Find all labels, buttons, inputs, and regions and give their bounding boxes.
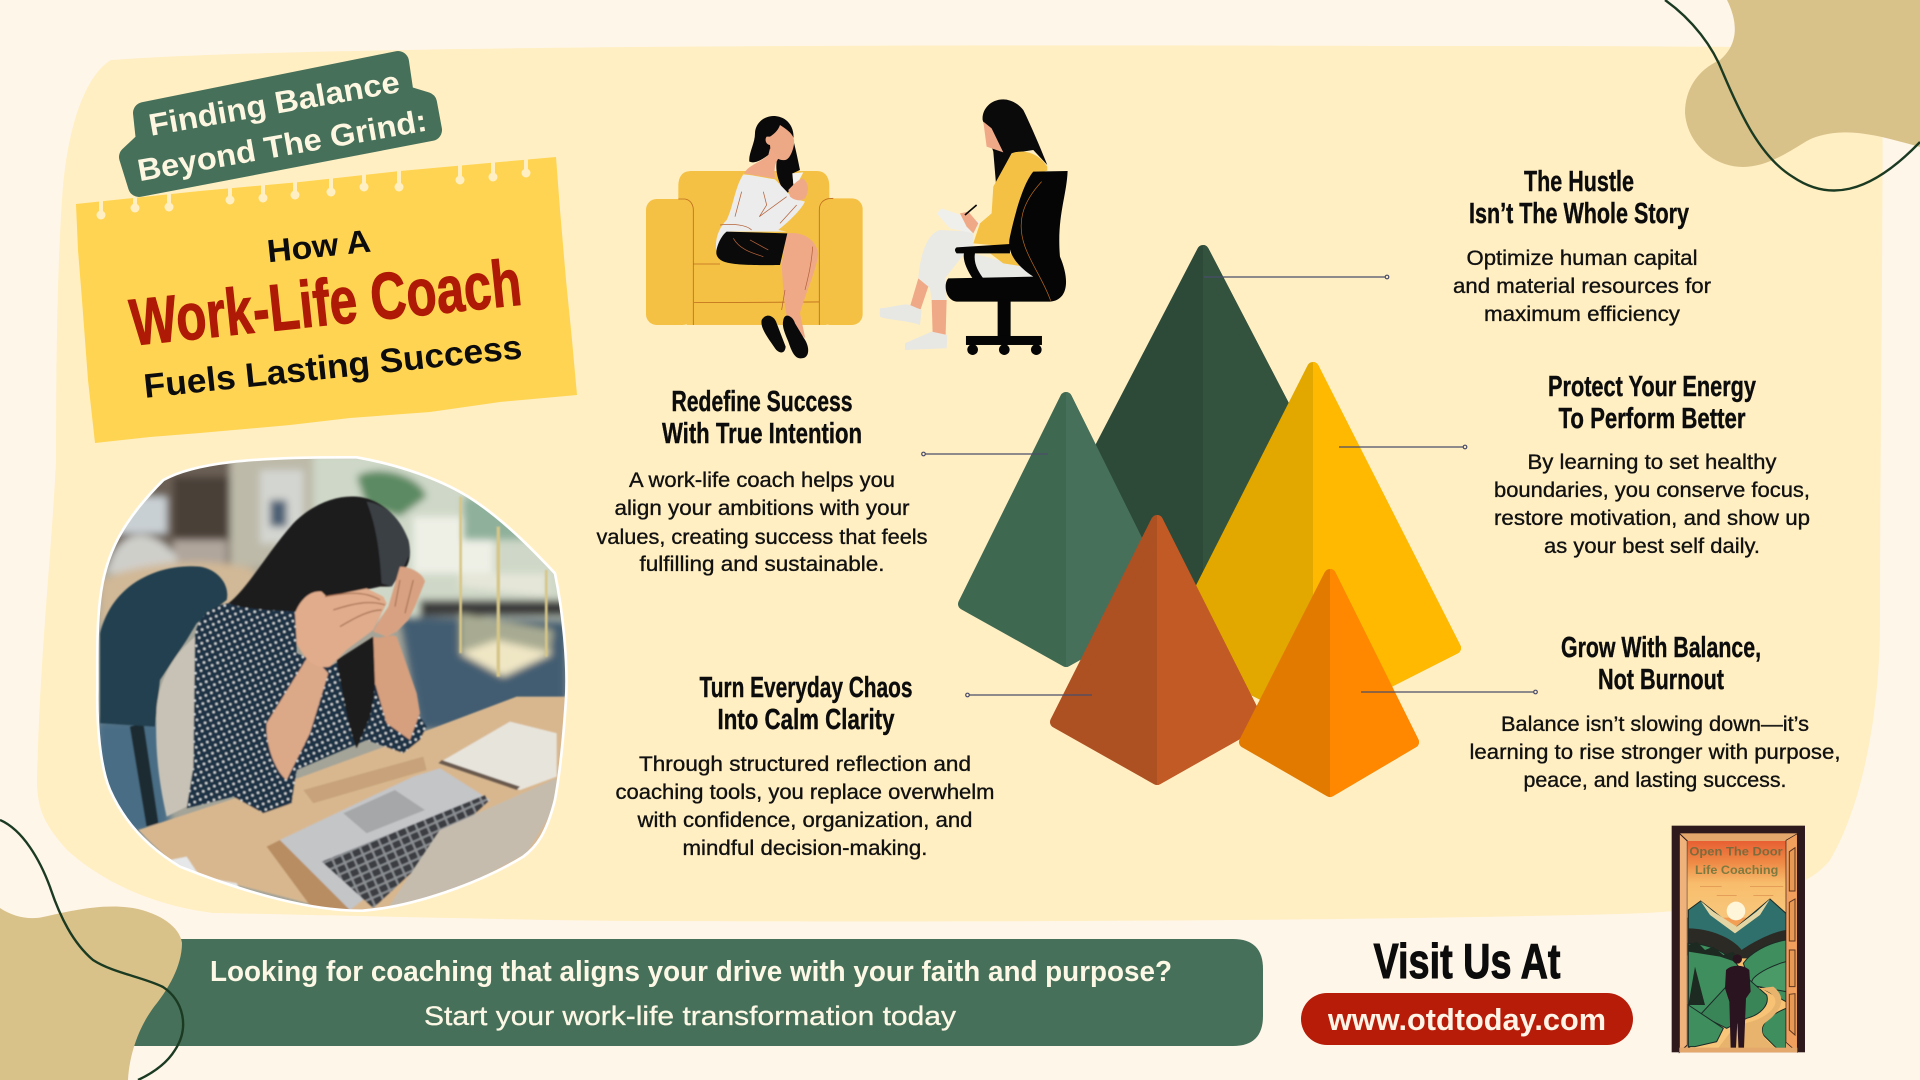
text block: Protect Your Energy: restore motivation, and show up xyxy=(1494,507,1810,530)
text: visit us at: Visit Us At xyxy=(1374,935,1560,989)
decoration: bottom-left blob xyxy=(0,907,182,1080)
logo: open the door life coaching xyxy=(1672,826,1805,1052)
title: green tab with subtitle: Beyond The Grind: xyxy=(135,103,429,188)
text block: Protect Your Energy: By learning to set healthy xyxy=(1528,451,1777,474)
text block: Protect Your Energy: boundaries, you conserve focus, xyxy=(1494,479,1810,502)
text block: Grow With Balance: peace, and lasting success. xyxy=(1524,769,1786,792)
title: green tab with subtitle xyxy=(130,62,431,188)
text block: The Hustle: Optimize human capital xyxy=(1466,247,1698,270)
text block: Redefine Success xyxy=(596,386,928,576)
chart: layered pyramids xyxy=(964,251,1455,791)
illustration: client on armchair xyxy=(646,116,863,358)
title: main headline xyxy=(126,223,525,406)
logo: open the door life coaching: Life Coaching xyxy=(1695,863,1778,877)
logo: open the door life coaching: Open The Door xyxy=(1689,845,1783,859)
text block: Protect Your Energy xyxy=(1494,371,1810,558)
decoration: bottom-left curve xyxy=(0,820,183,1080)
photo: stressed woman at laptop xyxy=(93,453,570,917)
title: main headline: Work-Life Coach xyxy=(126,245,525,359)
text block: Turn Everyday Chaos: Turn Everyday Chaos xyxy=(700,672,912,704)
text block: Turn Everyday Chaos: with confidence, organization, and xyxy=(636,809,972,832)
text block: The Hustle: maximum efficiency xyxy=(1484,303,1681,326)
text block: Redefine Success: fulfilling and sustainable. xyxy=(640,553,884,576)
text block: Redefine Success: With True Intention xyxy=(662,418,862,450)
text block: Grow With Balance: Grow With Balance, xyxy=(1561,632,1761,664)
text block: Turn Everyday Chaos xyxy=(616,672,994,860)
text block: Grow With Balance: Balance isn’t slowing down—it’s xyxy=(1501,713,1809,736)
text block: The Hustle: and material resources for xyxy=(1453,275,1711,298)
text block: Turn Everyday Chaos: coaching tools, you replace overwhelm xyxy=(616,781,994,804)
panel: title sticky note xyxy=(76,157,577,443)
button: website url xyxy=(1301,993,1633,1045)
panel: call-to-action banner: Looking for coaching that aligns your drive with your faith and purpose? xyxy=(210,956,1172,988)
pyramid: green xyxy=(964,398,1168,661)
text block: Turn Everyday Chaos: mindful decision-making. xyxy=(682,837,928,860)
icon: seated client figure xyxy=(716,116,818,358)
illustration: coach on office chair xyxy=(880,99,1068,355)
button: website url: www.otdtoday.com xyxy=(1327,1002,1606,1037)
text block: Turn Everyday Chaos: Through structured reflection and xyxy=(639,753,971,776)
panel: call-to-action banner xyxy=(120,939,1263,1046)
text block: Redefine Success: align your ambitions with your xyxy=(614,497,910,520)
pyramid: yellow xyxy=(1196,362,1461,700)
text block: Protect Your Energy: Protect Your Energy xyxy=(1548,371,1756,403)
pyramid: dark green xyxy=(1096,245,1289,586)
text block: Protect Your Energy: as your best self daily. xyxy=(1544,535,1760,558)
text block: Grow With Balance xyxy=(1470,632,1840,792)
text block: Grow With Balance: Not Burnout xyxy=(1598,664,1724,696)
icon: armchair xyxy=(646,171,863,325)
decoration: top-right blob xyxy=(1685,0,1920,167)
text block: Redefine Success: Redefine Success xyxy=(672,386,852,418)
pyramid: orange xyxy=(1245,575,1413,791)
title: green tab with subtitle: Finding Balance xyxy=(146,64,402,143)
text block: The Hustle: Isn’t The Whole Story xyxy=(1469,198,1689,230)
text block: Protect Your Energy: To Perform Better xyxy=(1558,403,1746,435)
title: main headline: Fuels Lasting Success xyxy=(142,328,524,406)
leader lines xyxy=(922,275,1537,697)
text block: Grow With Balance: learning to rise stronger with purpose, xyxy=(1470,741,1840,764)
text block: Redefine Success: A work-life coach helps you xyxy=(629,469,895,492)
background: yellow panel xyxy=(37,45,1883,921)
text block: Redefine Success: values, creating success that feels xyxy=(596,526,928,549)
panel: call-to-action banner: Start your work-life transformation today xyxy=(424,1001,957,1031)
title: main headline: How A xyxy=(265,223,372,269)
decoration: top-right curve xyxy=(1665,0,1920,191)
text block: The Hustle xyxy=(1453,166,1711,326)
text block: Turn Everyday Chaos: Into Calm Clarity xyxy=(718,704,894,736)
pyramid: rust xyxy=(1056,521,1258,779)
text block: The Hustle: The Hustle xyxy=(1524,166,1634,198)
